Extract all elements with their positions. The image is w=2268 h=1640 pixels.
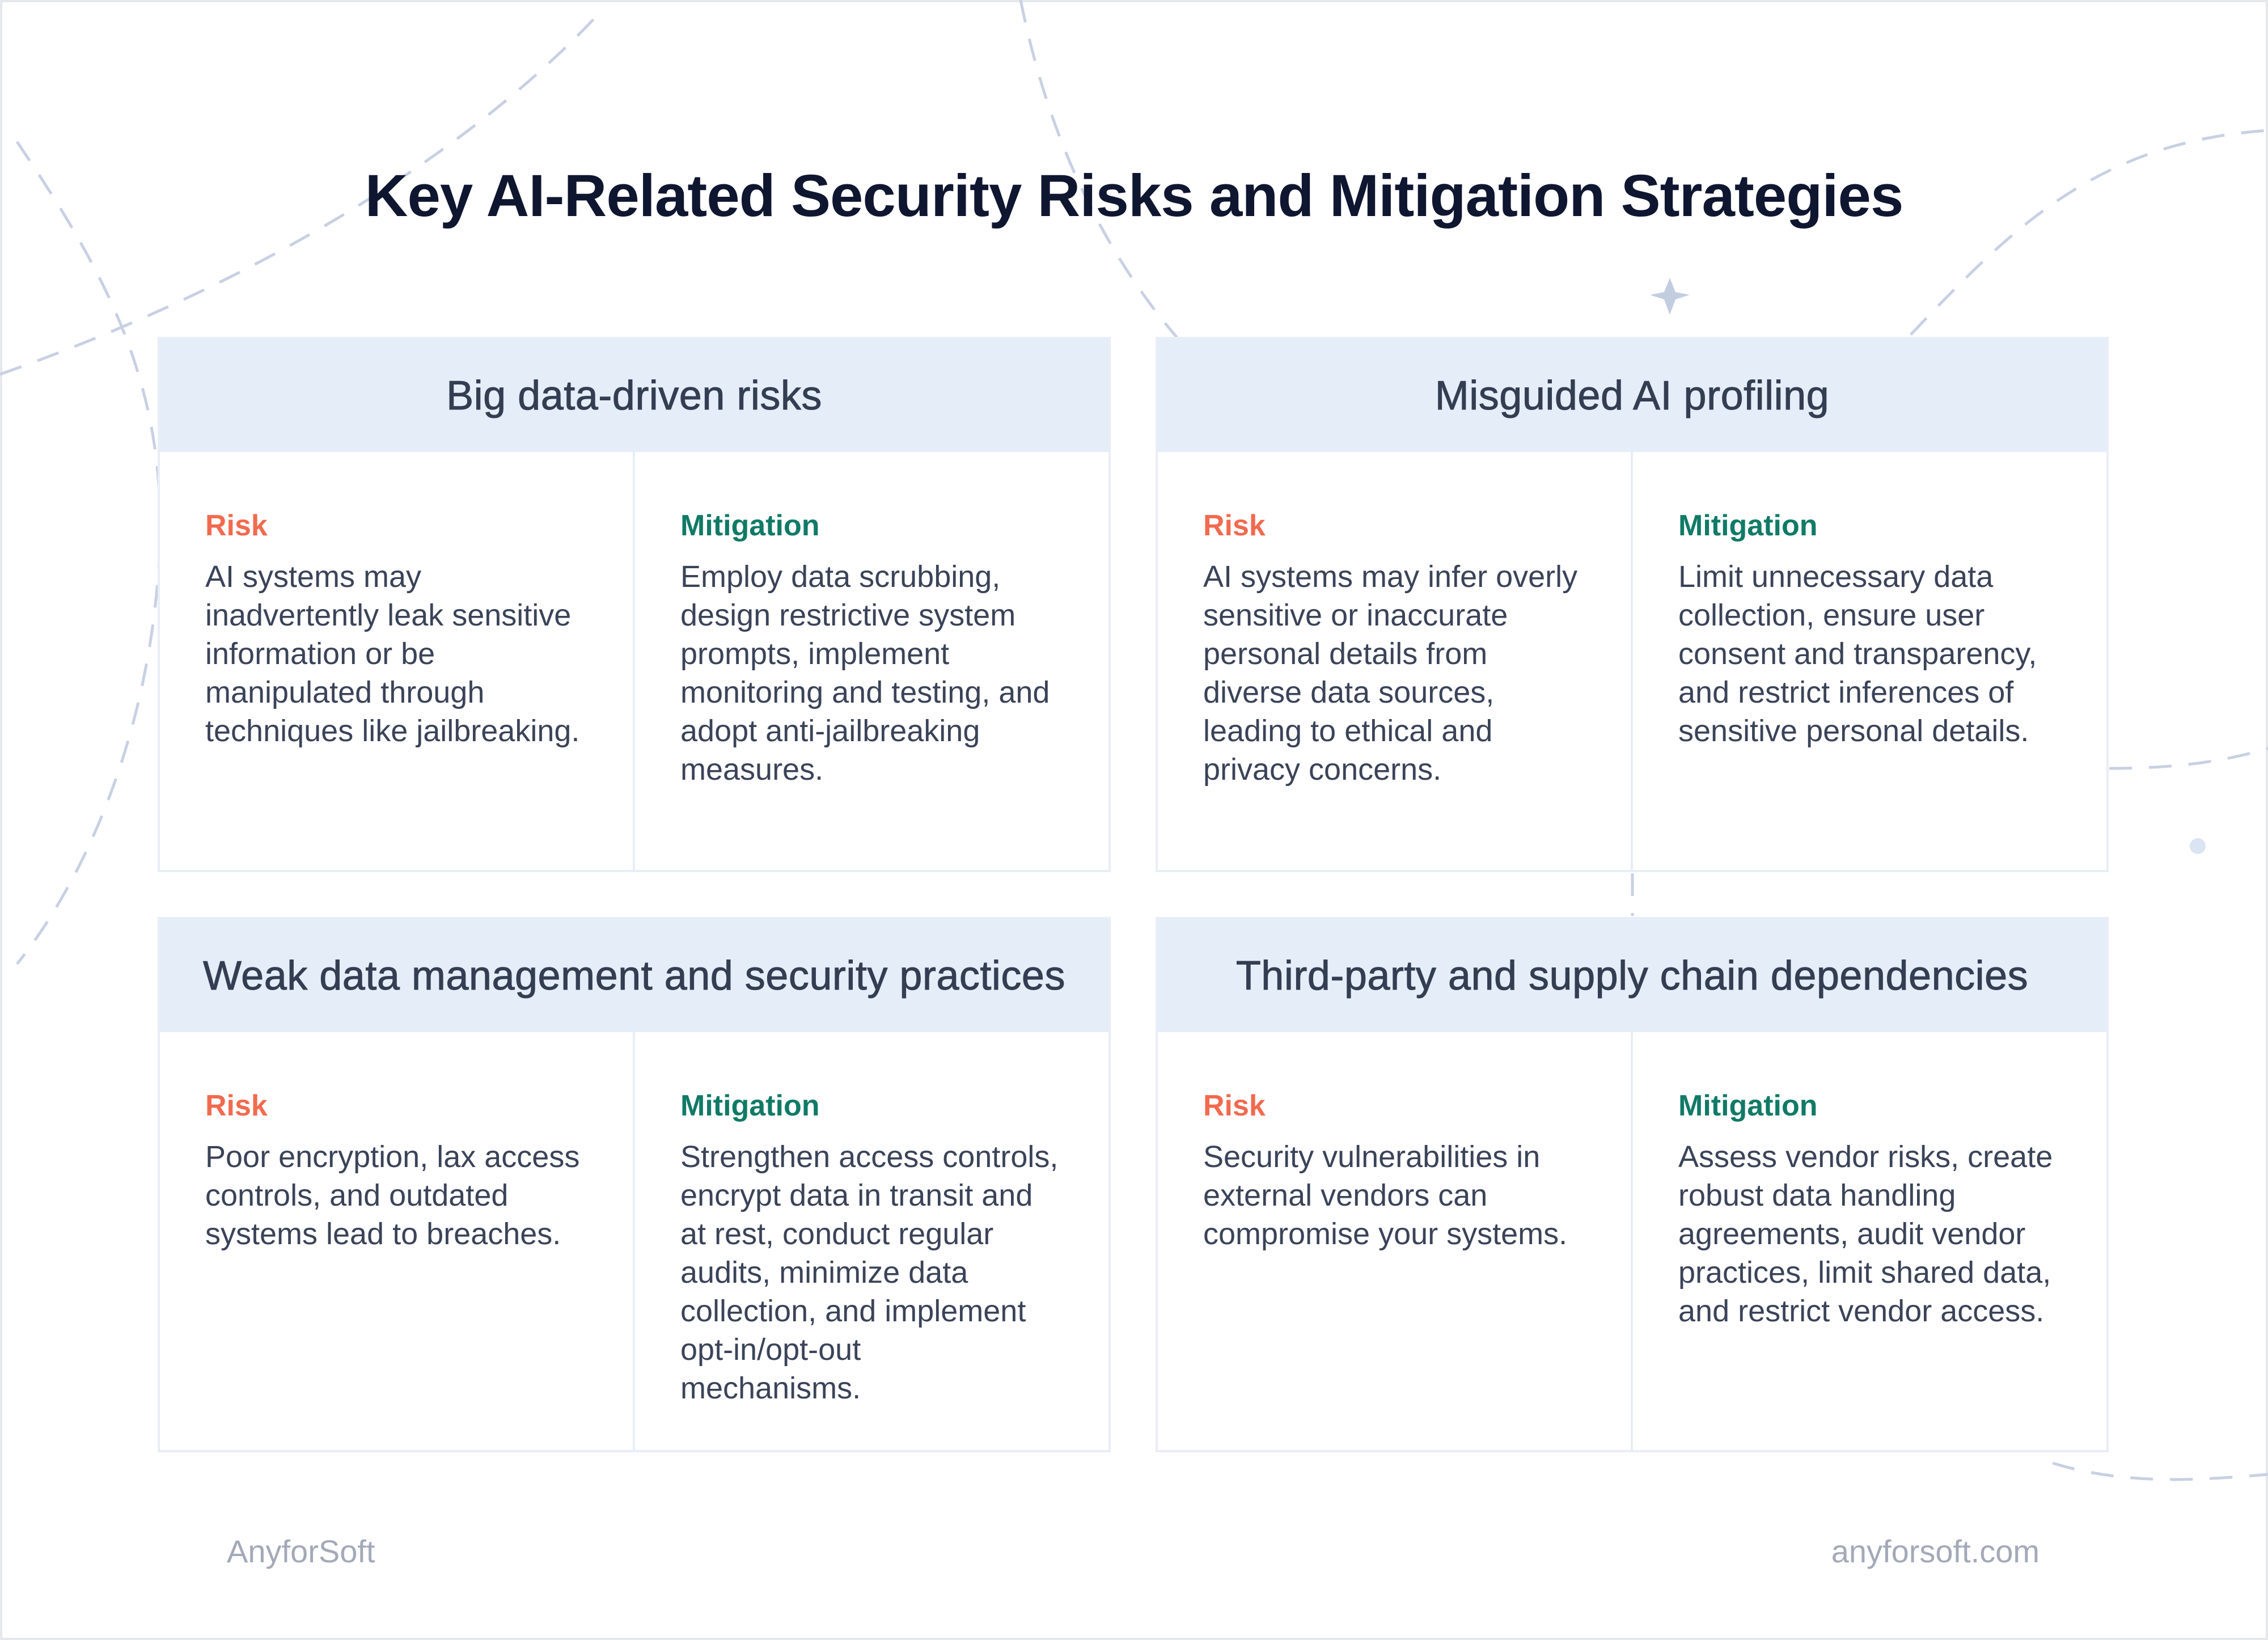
mitigation column: encrypt data in transit and: [680, 1178, 1033, 1212]
risk column: AI systems may: [205, 560, 421, 594]
mitigation column: robust data handling: [1678, 1178, 1956, 1212]
footer brand: AnyforSoft: [227, 1533, 375, 1569]
risk column: inadvertently leak sensitive: [205, 598, 571, 632]
mitigation column: audits, minimize data: [680, 1256, 968, 1290]
risk column: AI systems may infer overly: [1203, 560, 1577, 594]
panel: weak data management: [158, 917, 1111, 1452]
mitigation column: [680, 1089, 1058, 1405]
risk column: Risk: [205, 1089, 268, 1122]
heading: Big data-driven risks: [446, 373, 822, 419]
mitigation column: practices, limit shared data,: [1678, 1256, 2051, 1290]
mitigation column: consent and transparency,: [1678, 637, 2037, 671]
risk column: leading to ethical and: [1203, 714, 1492, 748]
heading: [1158, 339, 2106, 452]
panel: misguided AI profiling: [1156, 337, 2109, 872]
mitigation column: collection, ensure user: [1678, 598, 1984, 632]
risk column: systems lead to breaches.: [205, 1217, 561, 1251]
panel: big data-driven risks: [158, 337, 1111, 872]
risk column: Security vulnerabilities in: [1203, 1140, 1540, 1174]
mitigation column: at rest, conduct regular: [680, 1217, 993, 1251]
mitigation column: Mitigation: [1678, 1089, 1818, 1122]
mitigation column: Mitigation: [1678, 509, 1818, 542]
risk column: techniques like jailbreaking.: [205, 714, 579, 748]
mitigation column: prompts, implement: [680, 637, 949, 671]
risk column: Poor encryption, lax access: [205, 1140, 579, 1174]
heading: Misguided AI profiling: [1435, 373, 1829, 419]
mitigation column: monitoring and testing, and: [680, 675, 1050, 709]
mitigation column: and restrict inferences of: [1678, 675, 2013, 709]
heading: Weak data management and security practices: [203, 953, 1065, 998]
mitigation column: and restrict vendor access.: [1678, 1294, 2044, 1328]
risk column: personal details from: [1203, 637, 1487, 671]
panel: third-party dependencies: [1156, 917, 2109, 1452]
risk column: [1158, 452, 1633, 872]
heading: [160, 919, 1108, 1032]
risk column: Risk: [1203, 509, 1266, 542]
title: Key AI-Related Security Risks and Mitigation Strategies: [365, 163, 1903, 229]
mitigation column: Employ data scrubbing,: [680, 560, 1000, 594]
mitigation column: Assess vendor risks, create: [1678, 1140, 2053, 1174]
risk column: external vendors can: [1203, 1178, 1487, 1212]
mitigation column: [1678, 1089, 2053, 1328]
mitigation column: [1678, 509, 2037, 748]
risk column: [1158, 1032, 1633, 1452]
mitigation column: Strengthen access controls,: [680, 1140, 1058, 1174]
risk column: [160, 1032, 635, 1452]
risk column: sensitive or inaccurate: [1203, 598, 1508, 632]
risk column: Risk: [205, 509, 268, 542]
mitigation column: adopt anti-jailbreaking: [680, 714, 980, 748]
mitigation column: Mitigation: [680, 1089, 820, 1122]
footer url: anyforsoft.com: [1831, 1533, 2039, 1569]
heading: Third-party and supply chain dependencies: [1236, 953, 2028, 998]
mitigation column: agreements, audit vendor: [1678, 1217, 2025, 1251]
risk column: privacy concerns.: [1203, 753, 1441, 787]
heading: [1158, 919, 2106, 1032]
mitigation column: design restrictive system: [680, 598, 1015, 632]
mitigation column: mechanisms.: [680, 1371, 861, 1405]
mitigation column: Mitigation: [680, 509, 820, 542]
risk column: manipulated through: [205, 675, 484, 709]
risk column: controls, and outdated: [205, 1178, 508, 1212]
risk column: compromise your systems.: [1203, 1217, 1567, 1251]
heading: [160, 339, 1108, 452]
risk column: Risk: [1203, 1089, 1266, 1122]
mitigation column: [680, 509, 1050, 787]
risk column: diverse data sources,: [1203, 675, 1494, 709]
mitigation column: collection, and implement: [680, 1294, 1026, 1328]
mitigation column: measures.: [680, 753, 823, 787]
mitigation column: Limit unnecessary data: [1678, 560, 1993, 594]
mitigation column: sensitive personal details.: [1678, 714, 2029, 748]
risk column: information or be: [205, 637, 435, 671]
risk column: [160, 452, 635, 872]
mitigation column: opt-in/opt-out: [680, 1333, 861, 1367]
